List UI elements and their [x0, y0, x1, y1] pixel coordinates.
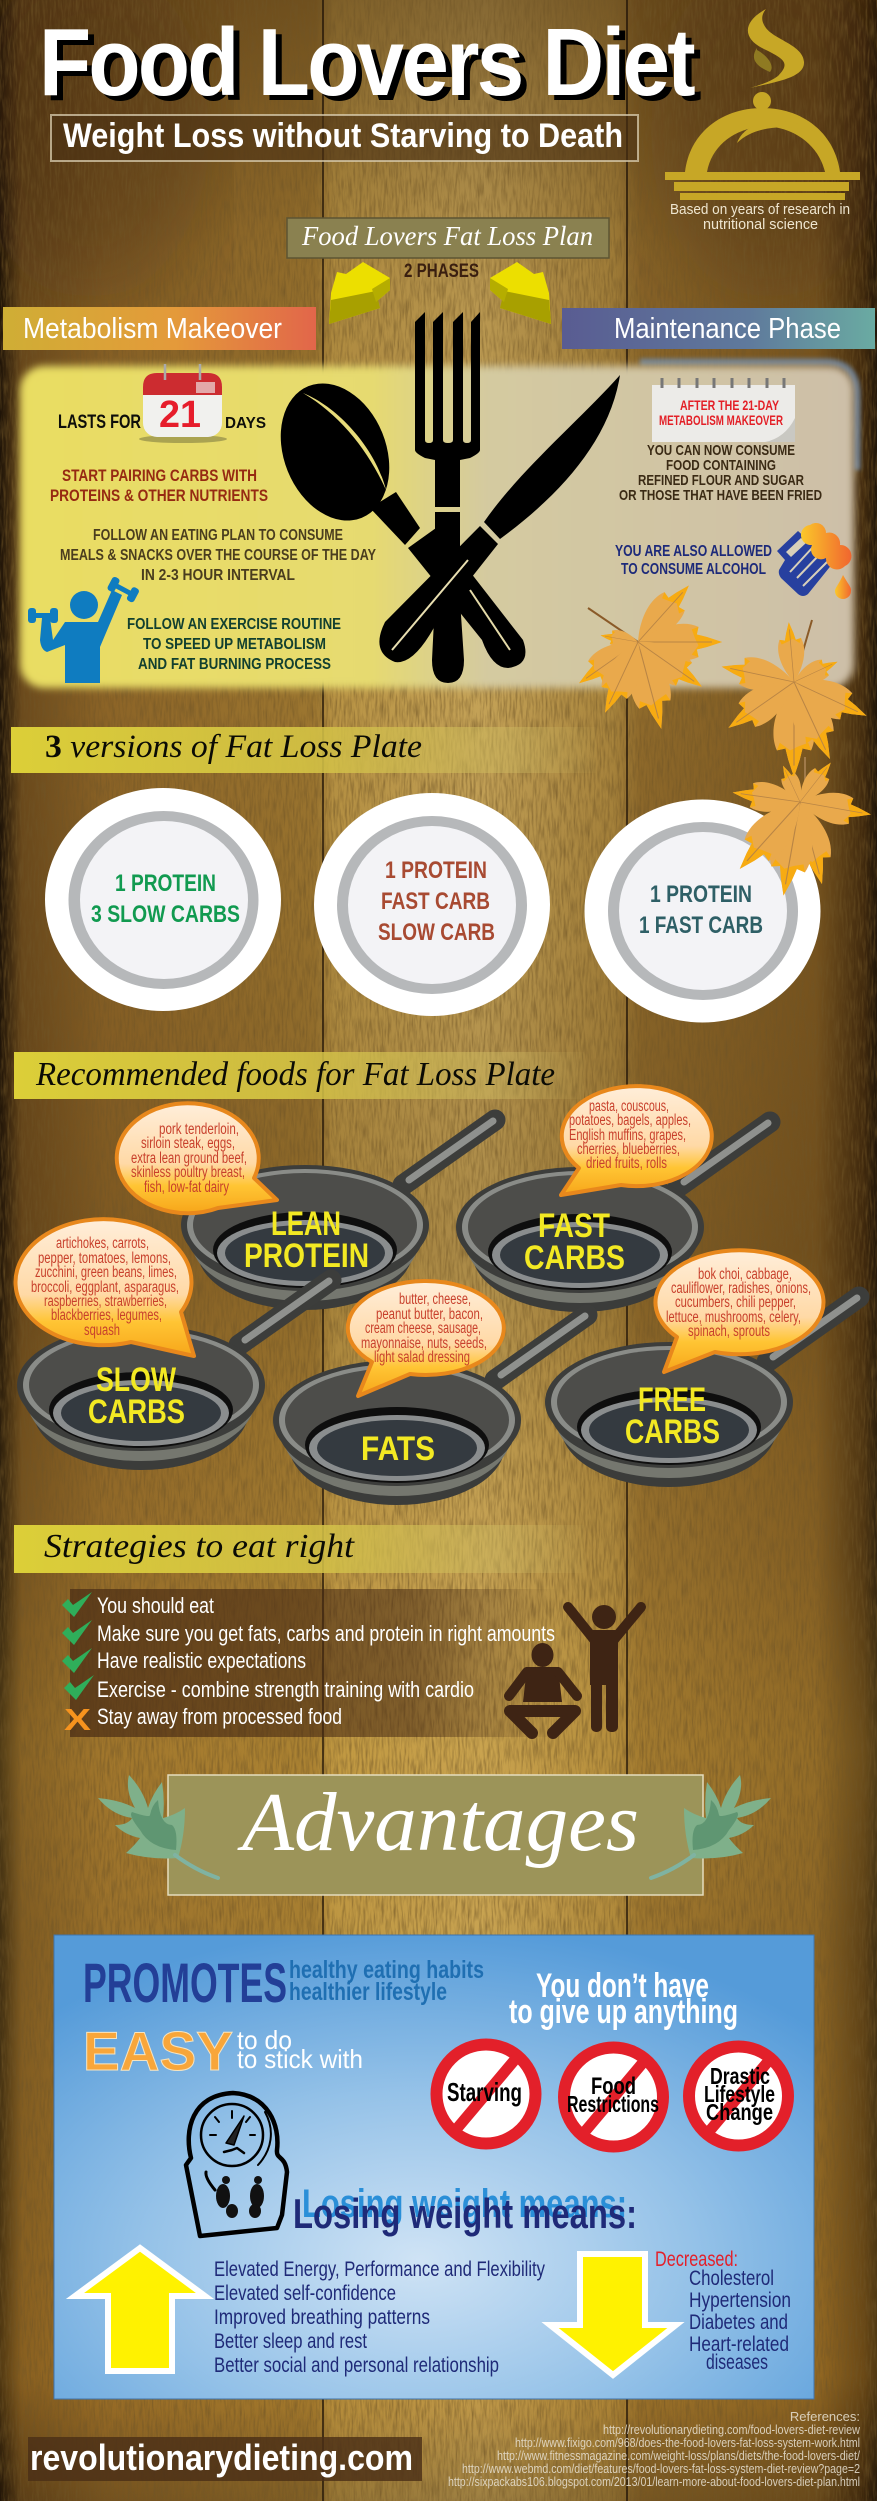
icon: cloche with steam [665, 9, 860, 200]
pan: fast carbs [456, 1122, 770, 1312]
panel: strategies list: Stay away from processed food [97, 1704, 342, 1729]
banner: maintenance phase [562, 308, 875, 349]
text: you don't have to give up anything: to give up anything [509, 1993, 738, 2031]
plate: three [584, 800, 820, 1022]
callout: lean protein foods: sirloin steak, eggs, [141, 1135, 235, 1152]
text: promotes: healthy eating habits [289, 1956, 484, 1984]
footer site name: revolutionarydieting.com [30, 2437, 413, 2478]
references [448, 2409, 861, 2489]
icon: beer mug [777, 523, 851, 599]
panel: strategies list: Have realistic expectations [97, 1648, 306, 1673]
text: easy: EASY [83, 2020, 233, 2082]
text: lasts for days [58, 412, 266, 433]
panel: strategies list: X [64, 1702, 91, 1737]
text: elevated benefits [214, 2258, 545, 2377]
callout: fats foods: light salad dressing [374, 1349, 470, 1366]
icon: no starving [436, 2044, 536, 2144]
plan heading box: Food Lovers Fat Loss Plan [301, 221, 593, 251]
heading: losing weight means [293, 2182, 637, 2237]
based on research note: nutritional science [703, 216, 818, 233]
leaf: lower right [718, 620, 874, 777]
text: eating plan: MEALS & SNACKS OVER THE COURSE OF THE DAY [60, 547, 377, 564]
callout: fast carbs foods: cherries, blueberries, [577, 1141, 680, 1158]
callout: lean protein foods: skinless poultry breast, [131, 1164, 245, 1181]
callout: free carbs foods: bok choi, cabbage, [698, 1266, 792, 1283]
arrow: down [550, 2254, 676, 2375]
callout: slow carbs foods: blackberries, legumes, [51, 1307, 162, 1324]
based on research note [670, 201, 850, 233]
heading: losing weight means: Losing weight means: [302, 2182, 627, 2226]
icon: no drastic lifestyle change: Drastic [710, 2063, 770, 2089]
callout: slow carbs foods: artichokes, carrots, [56, 1235, 149, 1252]
pan: free carbs [545, 1297, 859, 1487]
pan: free carbs: FREE [638, 1381, 706, 1419]
pan: fats [273, 1315, 587, 1505]
icon: no drastic lifestyle change: Lifestyle [704, 2081, 775, 2107]
callout: lean protein foods [117, 1103, 277, 1213]
section heading: strategies: Strategies to eat right [44, 1528, 356, 1565]
pan: fast carbs: FAST [538, 1207, 610, 1245]
text: eating plan: IN 2-3 HOUR INTERVAL [141, 567, 295, 584]
arrow: up [75, 2248, 205, 2371]
plate: one: 1 PROTEIN [115, 870, 216, 897]
panel: strategies list: Make sure you get fats, carbs and protein in right amounts [97, 1621, 555, 1646]
text: exercise routine [127, 616, 341, 673]
text: lasts for days: DAYS [225, 415, 266, 432]
icon: calendar 21: 21 [159, 394, 201, 436]
text: exercise routine: AND FAT BURNING PROCESS [138, 656, 331, 673]
text: decreased: Cholesterol [689, 2267, 774, 2290]
icon: no drastic lifestyle change [689, 2046, 788, 2146]
text: lasts for days: LASTS FOR [58, 412, 141, 433]
callout: free carbs foods: cauliflower, radishes, onions, [671, 1280, 811, 1297]
banner: metabolism makeover [3, 307, 316, 350]
text: eating plan [60, 527, 377, 584]
icon: no starving: Starving [447, 2077, 522, 2107]
text: pairing carbs [50, 467, 268, 505]
icon: weighing scale [186, 2093, 287, 2236]
text: what you can consume: REFINED FLOUR AND SUGAR [638, 472, 804, 489]
callout: fats foods: cream cheese, sausage, [365, 1320, 481, 1337]
plate: two: FAST CARB [381, 888, 490, 915]
plate: two: SLOW CARB [378, 919, 495, 946]
callout: fats foods [348, 1281, 504, 1396]
icon: spoon [261, 367, 525, 668]
callout: fast carbs foods [561, 1086, 712, 1195]
callout: lean protein foods: extra lean ground beef, [131, 1150, 247, 1167]
text: elevated benefits: Elevated Energy, Performance and Flexibility [214, 2258, 545, 2281]
text: decreased: Hypertension [689, 2289, 791, 2312]
plate: one: 3 SLOW CARBS [91, 901, 240, 928]
title: Food Lovers Diet [39, 9, 695, 116]
text: pairing carbs: PROTEINS & OTHER NUTRIENTS [50, 487, 268, 505]
text: you don't have to give up anything: You don’t have [536, 1967, 709, 2005]
text: eating plan: FOLLOW AN EATING PLAN TO CONSUME [93, 527, 343, 544]
title: Food Lovers Diet [45, 14, 701, 121]
text: decreased: Decreased: [655, 2248, 738, 2271]
callout: fast carbs foods: dried fruits, rolls [586, 1155, 667, 1172]
heading: advantages: Advantages [237, 1776, 639, 1869]
panel: blue benefits [54, 1935, 814, 2399]
callout: fats foods: butter, cheese, [399, 1291, 471, 1308]
text: alcohol: YOU ARE ALSO ALLOWED [615, 543, 772, 560]
text: easy: to do [237, 2025, 292, 2055]
section heading: plate versions [11, 727, 596, 773]
callout: slow carbs foods: pepper, tomatoes, lemons, [38, 1250, 171, 1267]
arrow: right phase [490, 262, 551, 324]
icon: note pad [652, 378, 795, 442]
text: promotes: healthier lifestyle [289, 1978, 447, 2006]
icon: squatting and standing figures [509, 1605, 641, 1733]
text: exercise routine: FOLLOW AN EXERCISE ROUTINE [127, 616, 341, 633]
panel: two phases [20, 362, 857, 688]
pan: slow carbs [17, 1280, 331, 1470]
pan: lean protein [181, 1120, 495, 1310]
text: decreased [655, 2248, 791, 2374]
text: alcohol [615, 543, 772, 578]
text: decreased: Diabetes and [689, 2311, 788, 2334]
pan: slow carbs: SLOW [96, 1361, 177, 1399]
text: easy [83, 2020, 363, 2082]
icon: exercising figure [28, 576, 140, 683]
text: promotes: PROMOTES [83, 1951, 287, 2014]
pan: slow carbs: CARBS [88, 1393, 185, 1431]
text: what you can consume: OR THOSE THAT HAVE BEEN FRIED [619, 487, 822, 504]
section heading: strategies [14, 1525, 584, 1573]
text: elevated benefits: Better social and personal relationship [214, 2354, 499, 2377]
section heading: plate versions: 3 versions of Fat Loss Plate [45, 729, 422, 765]
icon: fork [415, 312, 480, 683]
text: decreased: Heart-related [689, 2333, 789, 2356]
text: decreased: diseases [706, 2351, 768, 2374]
text: elevated benefits: Elevated self-confidence [214, 2282, 396, 2305]
leaf: green right [651, 1775, 771, 1878]
based on research note: Based on years of research in [670, 201, 850, 218]
plate: three: 1 PROTEIN [650, 881, 752, 908]
leaf: green left [98, 1775, 218, 1878]
panel: strategies list: Exercise - combine strength training with cardio [97, 1677, 474, 1702]
text: what you can consume: YOU CAN NOW CONSUME [647, 442, 795, 459]
callout: slow carbs foods: raspberries, strawberries, [44, 1293, 167, 1310]
heading: losing weight means: Losing weight means: [293, 2190, 637, 2237]
callout: slow carbs foods [16, 1219, 194, 1356]
icon: calendar 21 [139, 364, 227, 443]
pan: fast carbs: CARBS [524, 1239, 625, 1277]
2 phases label: 2 PHASES [404, 261, 479, 282]
plate: three: 1 FAST CARB [639, 912, 763, 939]
icon: no food restrictions: Food [591, 2073, 636, 2100]
text: elevated benefits: Improved breathing patterns [214, 2306, 430, 2329]
callout: slow carbs foods: squash [84, 1322, 120, 1339]
callout: free carbs foods: lettuce, mushrooms, celery, [666, 1309, 801, 1326]
leaf: over plate three [725, 756, 874, 899]
panel: strategies list: You should eat [97, 1593, 214, 1618]
plate: one [45, 788, 281, 1011]
text: pairing carbs: START PAIRING CARBS WITH [62, 467, 257, 485]
callout: fast carbs foods: potatoes, bagels, apples, [569, 1112, 691, 1129]
callout: slow carbs foods: zucchini, green beans, limes, [35, 1264, 177, 1281]
references: References: [790, 2409, 860, 2424]
pan: free carbs: CARBS [625, 1413, 720, 1451]
plan heading box [287, 218, 609, 258]
heading: advantages [168, 1775, 703, 1895]
pan: lean protein: LEAN [271, 1205, 341, 1243]
callout: free carbs foods: cucumbers, chili pepper, [675, 1294, 796, 1311]
callout: free carbs foods [656, 1250, 824, 1372]
icon: note pad: AFTER THE 21-DAY [680, 397, 779, 413]
arrow: left phase [329, 262, 390, 324]
icon: no food restrictions: Restrictions [567, 2091, 659, 2117]
icon: knife [379, 375, 620, 662]
text: you don't have to give up anything [509, 1967, 738, 2031]
callout: free carbs foods: spinach, sprouts [688, 1323, 770, 1340]
text: easy: to stick with [237, 2044, 363, 2074]
callout: fast carbs foods: pasta, couscous, [589, 1098, 669, 1115]
text: what you can consume [619, 442, 822, 504]
plate: two [314, 793, 550, 1016]
callout: slow carbs foods: broccoli, eggplant, asparagus, [31, 1279, 179, 1296]
banner: metabolism makeover: Metabolism Makeover [23, 313, 282, 345]
pan: lean protein: PROTEIN [244, 1237, 369, 1275]
pan: fats: FATS [361, 1430, 435, 1468]
leaf: lower left [570, 575, 722, 734]
callout: fats foods: peanut butter, bacon, [376, 1306, 483, 1323]
section heading: recommended foods: Recommended foods for Fat Loss Plate [35, 1056, 555, 1093]
icon: no food restrictions [564, 2048, 663, 2146]
text: what you can consume: FOOD CONTAINING [666, 457, 776, 474]
icon: note pad: METABOLISM MAKEOVER [659, 412, 783, 428]
icon: no drastic lifestyle change: Change [706, 2099, 773, 2125]
panel: strategies list [62, 1589, 560, 1737]
callout: lean protein foods: pork tenderloin, [159, 1121, 239, 1138]
subtitle: Weight Loss without Starving to Death [63, 117, 623, 155]
callout: fast carbs foods: English muffins, grapes, [569, 1127, 686, 1144]
text: exercise routine: TO SPEED UP METABOLISM [143, 636, 326, 653]
callout: lean protein foods: fish, low-fat dairy [144, 1179, 229, 1196]
text: elevated benefits: Better sleep and rest [214, 2330, 367, 2353]
banner: maintenance phase: Maintenance Phase [614, 313, 841, 345]
plate: two: 1 PROTEIN [385, 857, 487, 884]
text: alcohol: TO CONSUME ALCOHOL [621, 561, 766, 578]
callout: fats foods: mayonnaise, nuts, seeds, [361, 1335, 487, 1352]
